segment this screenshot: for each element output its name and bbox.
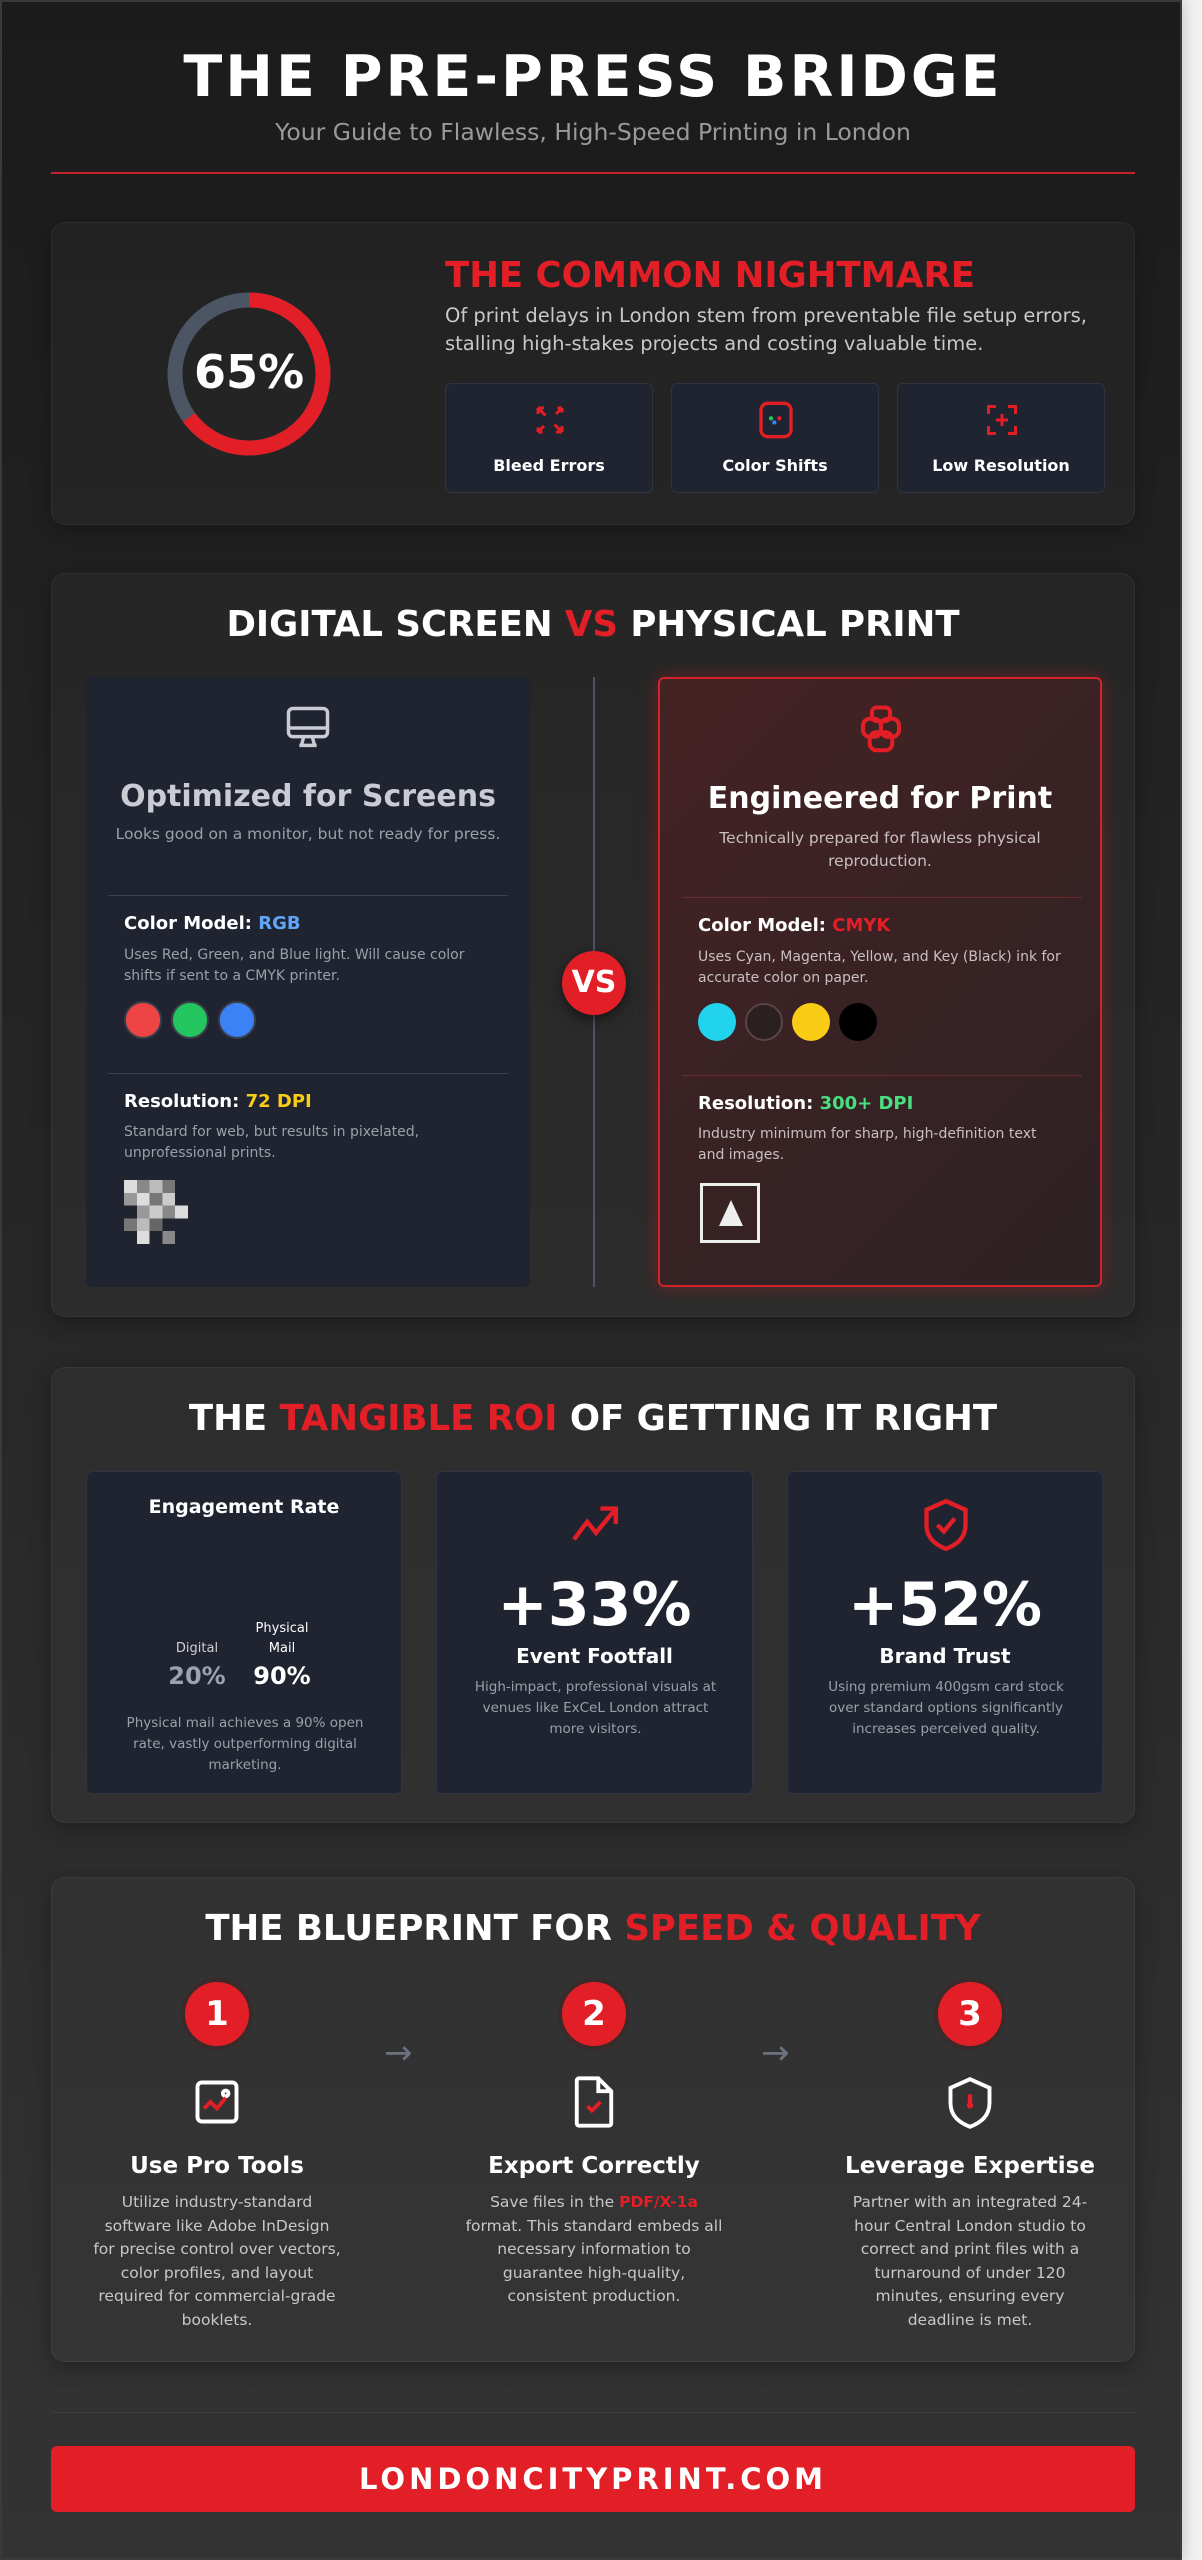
card: engagement bbox=[86, 1471, 402, 1794]
card: engagement: 20% bbox=[168, 1662, 226, 1690]
right panel: print: Technically prepared for flawless physical reproduction. bbox=[719, 829, 1041, 870]
card: brand trust: +52% bbox=[848, 1570, 1042, 1640]
color model CMYK: Color Model: CMYK bbox=[698, 915, 890, 936]
step 3: Leverage Expertise bbox=[845, 2153, 1095, 2179]
heading: THE TANGIBLE ROI OF GETTING IT RIGHT bbox=[189, 1398, 997, 1439]
step 3: Partner with an integrated 24-hour Central London studio to correct and print files with a turnaround of under 120 minutes, ensuring every deadline is met. bbox=[853, 2193, 1087, 2328]
resolution 300: Resolution: 300+ DPI bbox=[698, 1093, 913, 1114]
arrow: → bbox=[384, 2033, 412, 2073]
divider line bbox=[593, 677, 595, 1287]
icon: sharp image bbox=[700, 1183, 760, 1243]
color model RGB: Color Model: RGB bbox=[124, 913, 301, 934]
icon: pixelated bbox=[124, 1180, 188, 1244]
panel: ROI bbox=[51, 1367, 1135, 1823]
right panel: print: Industry minimum for sharp, high-definition text and images. bbox=[698, 1126, 1036, 1163]
footer banner bbox=[51, 2446, 1135, 2512]
left panel: screens bbox=[86, 677, 530, 1287]
left panel: screens: Looks good on a monitor, but not ready for press. bbox=[116, 825, 500, 843]
step 3: 3 bbox=[958, 1994, 982, 2034]
card: footfall: +33% bbox=[498, 1570, 691, 1640]
step 2 bbox=[466, 1978, 722, 2305]
error box: color bbox=[671, 383, 879, 493]
icon: monitor bbox=[286, 706, 330, 748]
step 1: Use Pro Tools bbox=[130, 2153, 304, 2179]
error box: bleed bbox=[445, 383, 653, 493]
card: engagement: Digital bbox=[176, 1641, 218, 1656]
panel: digital vs print bbox=[51, 573, 1135, 1317]
step 2: 2 bbox=[582, 1994, 606, 2034]
right panel: print: Uses Cyan, Magenta, Yellow, and Key (Black) ink for accurate color on paper. bbox=[698, 949, 1061, 986]
step 3 bbox=[845, 1978, 1095, 2328]
card: engagement: Physical Mail bbox=[256, 1621, 308, 1656]
card: brand trust: Using premium 400gsm card stock over standard options significantly increases perceived quality. bbox=[828, 1679, 1064, 1737]
step 2: Save files in the PDF/X-1a format. This standard embeds all necessary information to guarantee high-quality, consistent production. bbox=[466, 2193, 722, 2305]
error box: bleed: Bleed Errors bbox=[493, 456, 605, 475]
card: brand trust: Brand Trust bbox=[879, 1644, 1011, 1668]
card: brand trust bbox=[787, 1471, 1103, 1794]
heading: THE BLUEPRINT FOR SPEED & QUALITY bbox=[205, 1908, 981, 1949]
step 1: Utilize industry-standard software like Adobe InDesign for precise control over vectors, color profiles, and layout required for commercial-grade booklets. bbox=[93, 2193, 341, 2328]
heading: THE COMMON NIGHTMARE bbox=[445, 255, 975, 296]
left panel: screens: Uses Red, Green, and Blue light. Will cause color shifts if sent to a CMYK printer. bbox=[124, 947, 464, 984]
step 1 bbox=[93, 1978, 341, 2328]
card: engagement: Physical mail achieves a 90% open rate, vastly outperforming digital marketing. bbox=[127, 1715, 363, 1773]
subtitle: Your Guide to Flawless, High-Speed Printing in London bbox=[275, 118, 911, 146]
left panel: screens: Optimized for Screens bbox=[120, 779, 496, 814]
swatches bbox=[124, 1001, 256, 1039]
footer banner: LONDONCITYPRINT.COM bbox=[359, 2462, 827, 2496]
card: engagement: Engagement Rate bbox=[149, 1496, 339, 1518]
right panel: print: Engineered for Print bbox=[708, 781, 1052, 816]
heading: DIGITAL SCREEN VS PHYSICAL PRINT bbox=[226, 604, 960, 645]
VS badge bbox=[562, 951, 626, 1015]
card: footfall: High-impact, professional visuals at venues like ExCeL London attract more visitors. bbox=[475, 1679, 716, 1737]
step 1: 1 bbox=[205, 1994, 229, 2034]
panel: blueprint bbox=[51, 1877, 1135, 2362]
VS badge: VS bbox=[572, 965, 616, 1000]
arrow: → bbox=[761, 2033, 790, 2073]
step 2: Export Correctly bbox=[488, 2153, 700, 2179]
error box: resolution: Low Resolution bbox=[932, 456, 1070, 475]
title: THE PRE-PRESS BRIDGE bbox=[183, 44, 1003, 110]
donut chart 65% bbox=[168, 292, 330, 456]
error box: color: Color Shifts bbox=[722, 456, 828, 475]
description: Of print delays in London stem from preventable file setup errors, stalling high-stakes projects and costing valuable time. bbox=[445, 304, 1087, 355]
card: engagement: 90% bbox=[253, 1662, 311, 1690]
resolution 72: Resolution: 72 DPI bbox=[124, 1091, 312, 1112]
icon: cmyk bbox=[861, 706, 901, 752]
card: footfall: Event Footfall bbox=[516, 1644, 673, 1668]
panel: common nightmare bbox=[51, 222, 1135, 525]
left panel: screens: Standard for web, but results in pixelated, unprofessional prints. bbox=[124, 1124, 419, 1161]
right panel: print bbox=[658, 677, 1102, 1287]
donut chart 65%: 65% bbox=[194, 345, 304, 399]
error box: resolution bbox=[897, 383, 1105, 493]
swatches bbox=[698, 1003, 877, 1041]
card: footfall bbox=[436, 1471, 753, 1794]
